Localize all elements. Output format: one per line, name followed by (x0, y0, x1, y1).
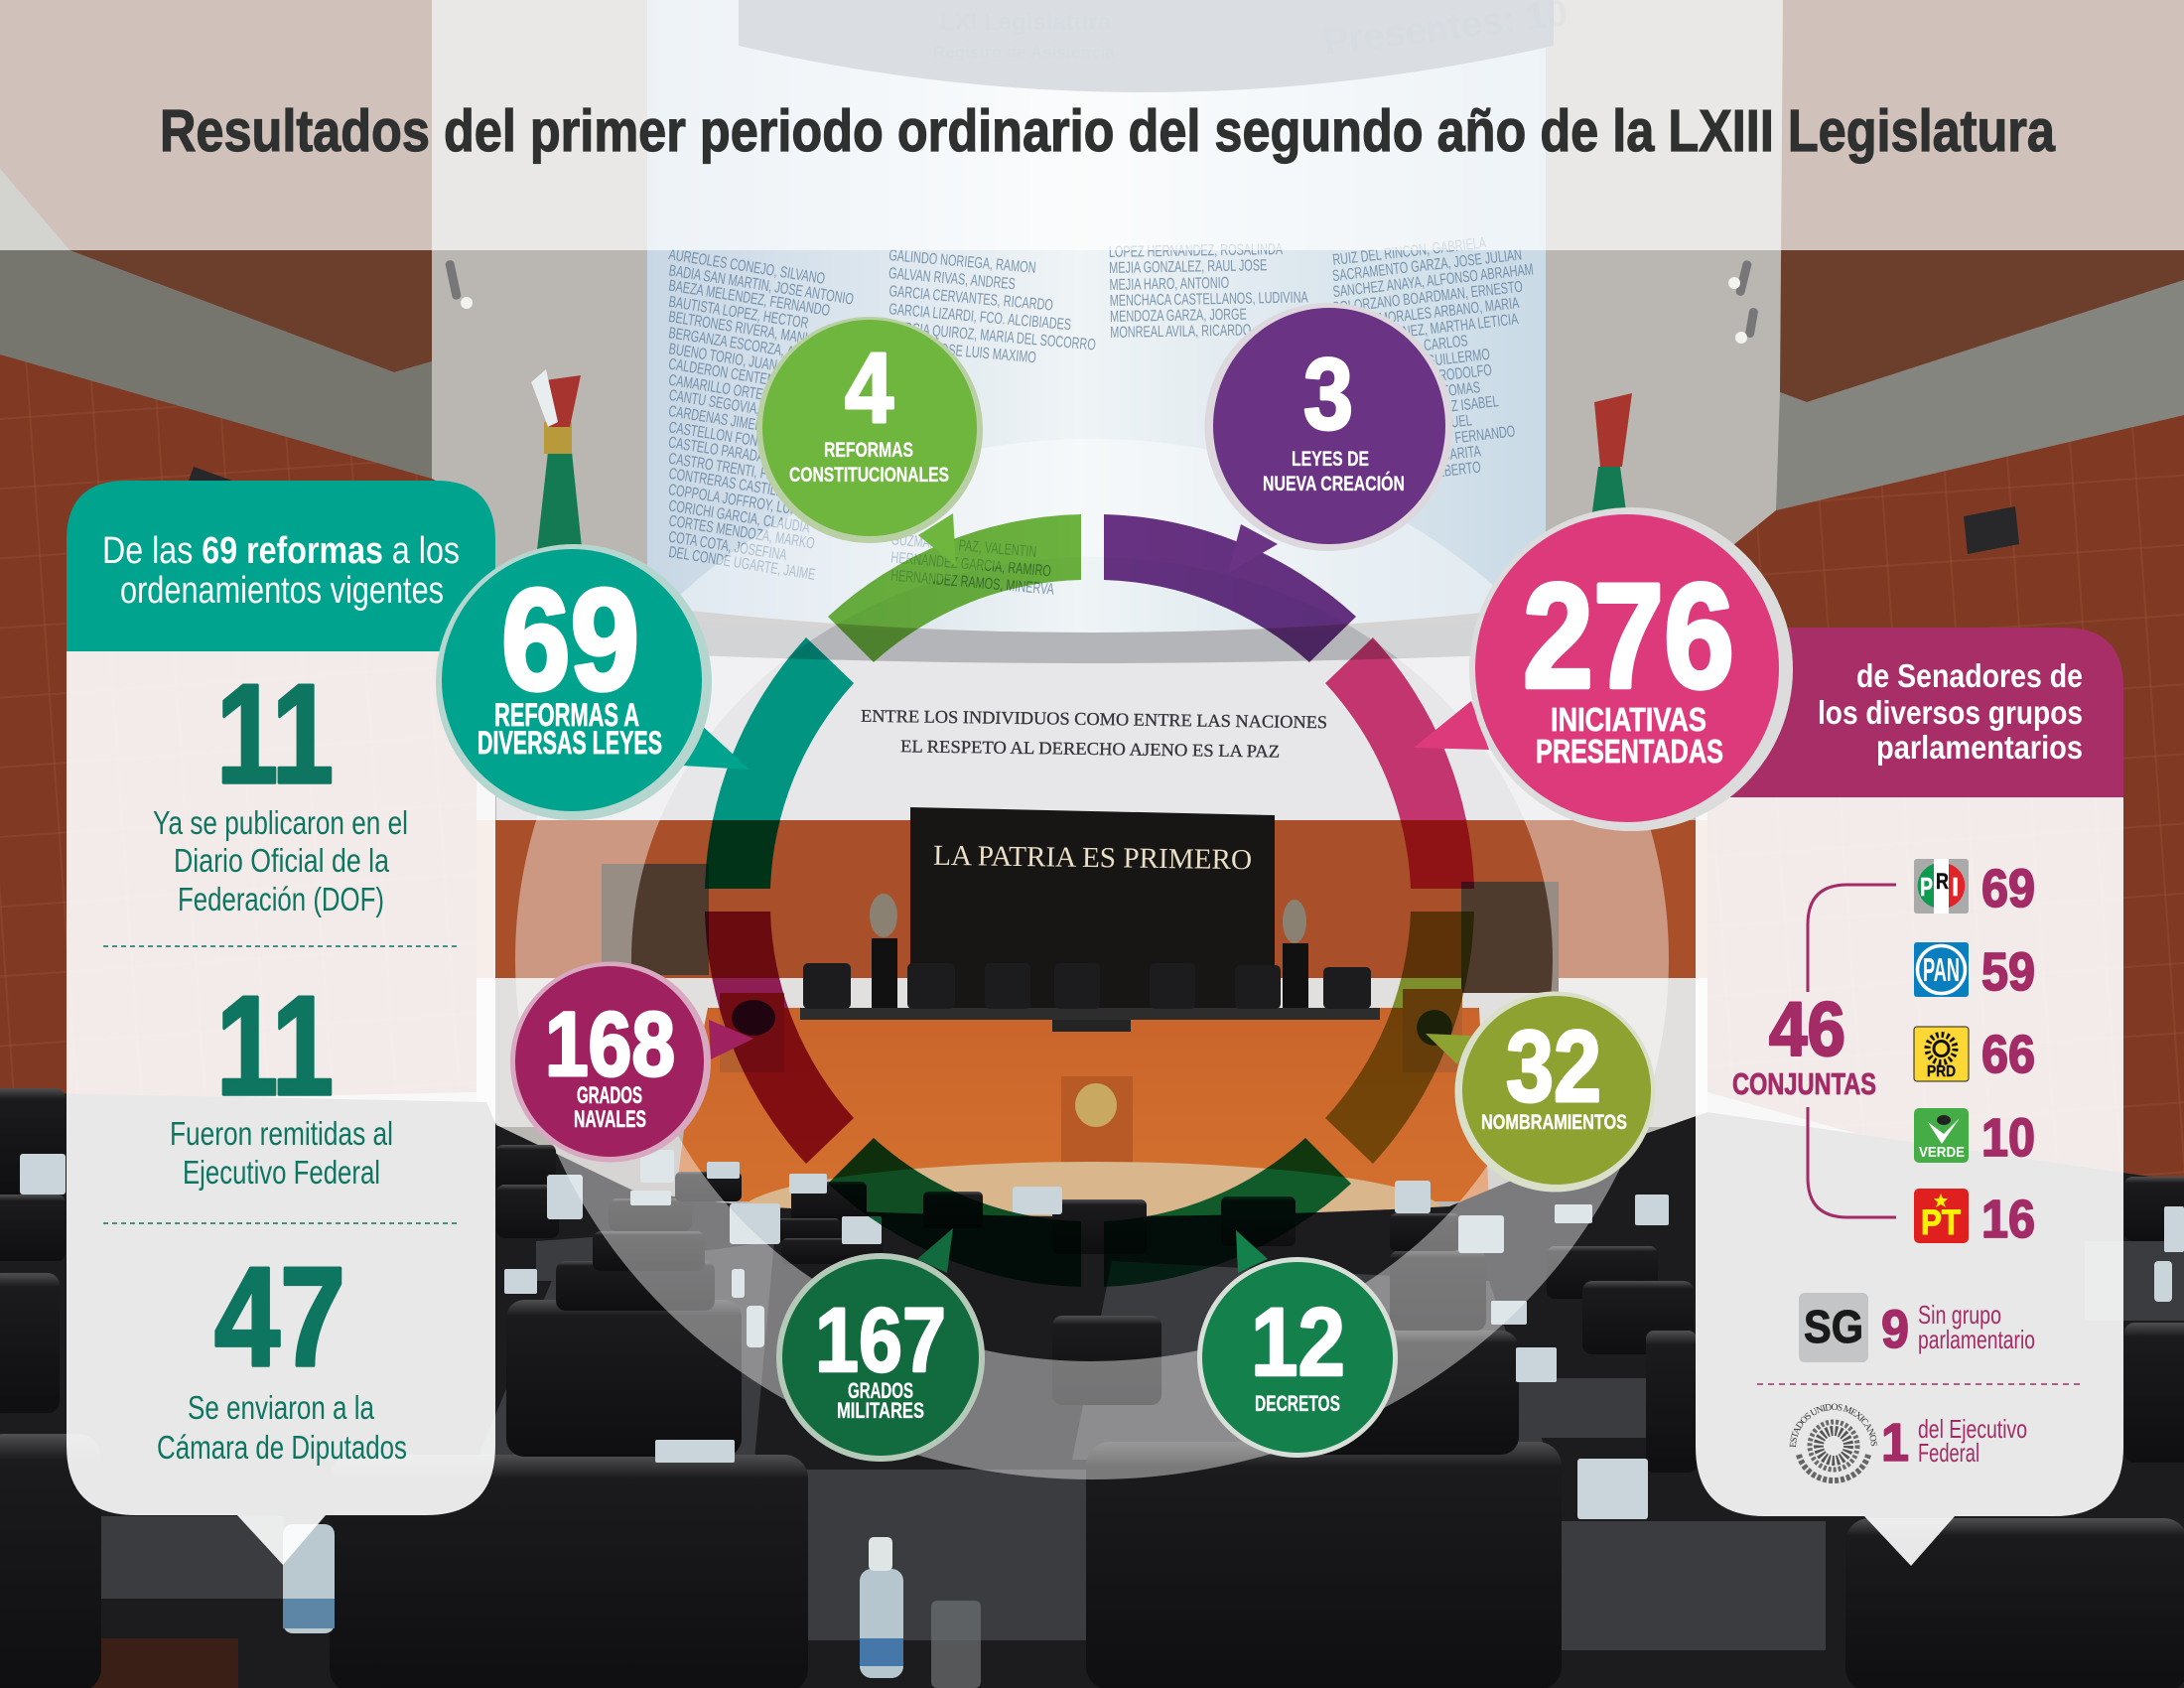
bubble: 12 decretos: 12 (1251, 1288, 1345, 1396)
segment: reformas constitucionales (828, 514, 1081, 662)
names on screen: CALDERON CENTENO, JOSE (667, 354, 818, 395)
names on screen: BAUTISTA LOPEZ, HECTOR (667, 293, 810, 332)
names on screen: ZARATE SALGADO ALBERTO (1331, 459, 1482, 492)
right brick wall (1707, 415, 2184, 1192)
names on screen: VEGA GARCIA HILDA TOMAS (1331, 378, 1481, 412)
bubble: 12 decretos (1197, 1230, 1398, 1458)
names on screen: TAGLE MARTINEZ, MARTHA LETICIA (1331, 310, 1520, 349)
white strip (477, 978, 1707, 1127)
ring diagram segments (705, 514, 1474, 1287)
logo: PAN (1914, 942, 1969, 997)
header text: de Senadores de (1856, 657, 2083, 694)
header text: parlamentarios (1876, 729, 2083, 766)
ejecutivo federal: del Ejecutivo (1918, 1414, 2027, 1444)
stat: 11 remitidas: Fueron remitidas al (170, 1115, 393, 1152)
names on screen: COPPOLA JOFFROY, LUIS (667, 481, 802, 518)
red band (477, 820, 1707, 984)
header text (1818, 657, 2083, 766)
bubble: 168 grados navales: NAVALES (574, 1106, 646, 1133)
panel: senadores por grupo (1696, 628, 2123, 1566)
stat: 11 remitidas: Ejecutivo Federal (183, 1154, 380, 1191)
names on screen: BELTRONES RIVERA, MANLIO (667, 308, 823, 350)
names on screen: CANTU SEGOVIA, ELOY (668, 386, 792, 423)
logo: PRD: PRD (1927, 1063, 1956, 1080)
bubble: 69 reformas a diversas leyes: 69 (501, 559, 639, 720)
bubble: 32 nombramientos (1426, 991, 1656, 1192)
bubble: 168 grados navales: 168 (545, 994, 675, 1095)
segment: grados militares (828, 1138, 1081, 1287)
white wall (496, 645, 1688, 834)
names on screen: CASTELO PARADA, JAVIER (667, 433, 808, 473)
soffit (496, 606, 1688, 663)
names on screen: SANCHEZ ANAYA, ALFONSO ABRAHAM (1332, 260, 1535, 301)
left brick wall (0, 354, 477, 1102)
names on screen: HERNANDEZ GARCIA, RAMIRO (890, 548, 1052, 580)
side lecterns (720, 989, 1462, 1072)
bubble: 69 reformas a diversas leyes: DIVERSAS LEYES (478, 725, 662, 761)
names on screen: COTA COTA, JOSEFINA (667, 528, 789, 564)
segment: reformas a diversas leyes (705, 637, 854, 889)
stat: 11 publicadas: 11 (216, 655, 334, 813)
screen header shape (739, 0, 1554, 92)
header text: De las 69 reformas a los (102, 530, 460, 572)
dais chairs (803, 963, 1371, 1009)
translucent ring (515, 439, 1669, 1479)
names on screen: LOPEZ HERNANDEZ, ROSALINDA (1109, 240, 1284, 261)
logo: PT: PT (1921, 1203, 1961, 1242)
names on screen: GALVAN RIVAS, ANDRES (887, 264, 1017, 293)
names on screen: AUREOLES CONEJO, SILVANO (667, 245, 826, 287)
flags (531, 369, 1632, 586)
bubble: 168 grados navales: GRADOS (577, 1082, 642, 1109)
party counts: 59 (1981, 942, 2035, 1002)
water bottles (283, 1261, 2172, 1688)
names on screen: GARCIA CERVANTES, RICARDO (888, 282, 1054, 314)
panel header (67, 481, 495, 651)
floor under desks (81, 1638, 238, 1688)
ceiling panel left (0, 0, 432, 372)
names on screen: GUZMAN DE PAZ, VALENTIN (890, 530, 1037, 561)
wall inscription (861, 706, 1327, 762)
names on screen: SACRAMENTO GARZA, JOSE JULIAN (1331, 245, 1523, 285)
sin grupo (1799, 1293, 2035, 1362)
title band (0, 0, 2184, 250)
party counts (1981, 859, 2035, 1249)
bubble: 4 reformas constitucionales: CONSTITUCIONALES (789, 464, 949, 487)
joint count: 46 (1769, 987, 1845, 1072)
ejecutivo federal (1789, 1404, 2027, 1483)
sin grupo: 9 (1881, 1300, 1909, 1359)
black panel (910, 807, 1275, 1008)
names on screen: MENCHACA CASTELLANOS, LUDIVINA (1110, 288, 1309, 310)
names on screen: TORRES GARCIA CARLOS (1331, 332, 1469, 364)
icon: national seal: ESTADOS UNIDOS MEXICANOS (1789, 1404, 1878, 1448)
names on screen: CARDENAS JIMENEZ (667, 402, 778, 437)
logo: VERDE: VERDE (1919, 1144, 1965, 1161)
names on screen: VAZQUEZ ARNULFO RODOLFO (1331, 361, 1493, 396)
bubble: 167 grados militares: GRADOS (848, 1378, 913, 1403)
names on screen: MEJIA HARO, ANTONIO (1109, 274, 1229, 294)
bubble: 32 nombramientos: NOMBRAMIENTOS (1481, 1111, 1627, 1134)
panel header (1688, 628, 2123, 797)
podium (1052, 1010, 1133, 1193)
ejecutivo federal: 1 (1881, 1413, 1909, 1473)
stat: 11 publicadas (153, 655, 408, 917)
bubble: 4 reformas constitucionales: REFORMAS (824, 439, 913, 462)
relief panels (602, 864, 709, 975)
stat: 47 diputados: 47 (214, 1238, 345, 1396)
floor (740, 1162, 1444, 1265)
names on screen: CORICHI GARCIA, CLAUDIA (667, 496, 812, 536)
ejecutivo federal: Federal (1918, 1438, 1979, 1468)
names on screen: MEJIA GONZALEZ, RAUL JOSE (1109, 256, 1267, 277)
screen (647, 0, 1546, 633)
joint count: CONJUNTAS (1732, 1066, 1876, 1101)
stat: 11 publicadas: Federación (DOF) (178, 881, 384, 917)
bubble: 168 grados navales (510, 961, 753, 1162)
bubble: 69 reformas a diversas leyes: REFORMAS A (494, 697, 639, 733)
segment: iniciativas presentadas (1325, 637, 1474, 889)
stat: 47 diputados (157, 1238, 407, 1466)
stat: 47 diputados: Se enviaron a la (188, 1389, 375, 1426)
names on screen: GARCIA QUIROZ, MARIA DEL SOCORRO (888, 318, 1096, 353)
bubble: 276 iniciativas presentadas: PRESENTADAS (1536, 733, 1723, 770)
bubble: 32 nombramientos: 32 (1506, 1010, 1601, 1123)
names on screen: BADIA SAN MARTIN, JOSE ANTONIO (668, 261, 855, 308)
panel: reformas ordenamientos: ordenamientos vigentes (120, 570, 444, 612)
names on screen (621, 0, 1570, 600)
busts (870, 894, 1308, 1013)
names on screen: CORTES MENDOZA, MARKO (668, 511, 816, 552)
bubble: 69 reformas a diversas leyes (436, 544, 750, 820)
bubble: 3 leyes de nueva creacion (1205, 303, 1453, 573)
logo: PRI: I (1952, 872, 1959, 902)
bubble: 167 grados militares: MILITARES (837, 1398, 924, 1423)
names on screen: CONTRERAS CASTILLO, ROSA (668, 465, 829, 506)
logo: PRI: P (1920, 872, 1933, 902)
names on screen: BAEZA MELENDEZ, FERNANDO (667, 277, 831, 320)
stat: 11 publicadas: Ya se publicaron en el (153, 804, 408, 841)
names on screen: MONREAL AVILA, RICARDO (1110, 321, 1251, 341)
stat: 11 publicadas: Diario Oficial de la (174, 842, 390, 879)
segment: decretos (1104, 1138, 1351, 1287)
joint count (1732, 987, 1876, 1101)
spotlights (445, 259, 1759, 344)
bubble: 4 reformas constitucionales (756, 317, 983, 566)
bubble: 3 leyes de nueva creacion: NUEVA CREACIÓN (1263, 472, 1405, 495)
names on screen: YUNES ZORRILLA MANUEL (1331, 411, 1473, 445)
names on screen: SOTELO MORALES ARBANO, MARIA (1331, 294, 1521, 333)
bubble: 167 grados militares (776, 1228, 985, 1462)
party counts: 66 (1981, 1025, 2035, 1084)
logo: PRI: R (1936, 869, 1949, 894)
names on screen: HERNANDEZ RAMOS, MINERVA (890, 566, 1055, 598)
wall inscription: EL RESPETO AL DERECHO AJENO ES LA PAZ (900, 736, 1280, 762)
logo: PT (1914, 1189, 1969, 1243)
bubble: 276 iniciativas presentadas: 276 (1523, 552, 1734, 719)
sin grupo: parlamentario (1918, 1325, 2035, 1354)
names on screen: CAMARILLO ORTEGA (667, 371, 780, 406)
ceiling panel right (1780, 0, 2184, 402)
names on screen: ZAMORA GARCIA JUAN FERNANDO (1331, 422, 1516, 461)
names on screen: BUENO TORIO, JUAN (668, 340, 778, 374)
names on screen: BERGANZA ESCORZA, ADRIANA (667, 324, 836, 367)
monitors and name cards (20, 1150, 2184, 1519)
bubble: 3 leyes de nueva creacion: LEYES DE (1292, 448, 1369, 471)
names on screen: TREVINO GARCIA GUILLERMO (1331, 346, 1491, 380)
bubble: 276 iniciativas presentadas: INICIATIVAS (1551, 701, 1706, 738)
names on screen: CASTRO TRENTI, FERNANDO (667, 450, 822, 491)
chairs (0, 1088, 2184, 1688)
party counts: 16 (1981, 1190, 2035, 1249)
logo: PAN: PAN (1923, 951, 1960, 988)
names on screen: SOLORZANO BOARDMAN, ERNESTO (1331, 278, 1524, 317)
names on screen: GALINDO NORIEGA, RAMON (888, 246, 1036, 276)
names on screen: VILLARREAL GONZALEZ ISABEL (1331, 392, 1500, 429)
bubble: 12 decretos: DECRETOS (1255, 1391, 1340, 1416)
names on screen: LXI Legislatura (940, 9, 1112, 36)
bubble: 276 iniciativas presentadas (1414, 507, 1793, 831)
lower seating area (0, 1092, 2184, 1688)
names on screen: GOMEZ, JOSE LUIS MAXIMO (888, 336, 1037, 366)
names on screen: RUIZ DEL RINCON, GABRIELA (1331, 233, 1488, 268)
desks (101, 1231, 2184, 1650)
names on screen: MENDOZA GARZA, JORGE (1110, 306, 1247, 325)
party counts: 69 (1981, 859, 2035, 918)
names on screen: GARCIA LIZARDI, FCO. ALCIBIADES (888, 300, 1072, 334)
icon: national seal (1789, 1404, 1878, 1483)
names on screen: Registro de Asistencia (933, 43, 1115, 62)
wood dais (675, 1008, 1489, 1201)
segment: leyes de nueva creacion (1104, 514, 1356, 662)
stat: 11 remitidas: 11 (216, 967, 334, 1125)
speaker (1964, 506, 2019, 554)
logo: PRI (1914, 859, 1969, 914)
sin grupo: Sin grupo (1918, 1300, 2001, 1330)
bubble: 3 leyes de nueva creacion: 3 (1303, 338, 1353, 451)
segment: grados navales (705, 912, 854, 1164)
logo: PRD (1914, 1027, 1969, 1081)
names on screen: ZAPATA GARCIA MARGARITA (1331, 442, 1482, 477)
bubble: 4 reformas constitucionales: 4 (845, 333, 893, 444)
logo: VERDE (1914, 1108, 1969, 1163)
names on screen: DEL CONDE UGARTE, JAIME (667, 543, 817, 584)
segment: nombramientos (1325, 912, 1474, 1164)
panel inscription: LA PATRIA ES PRIMERO (933, 840, 1252, 876)
connector bracket (1808, 885, 1896, 1217)
stat: 11 remitidas (170, 967, 393, 1191)
header text: los diversos grupos (1818, 694, 2083, 731)
bubble: 167 grados militares: 167 (815, 1290, 946, 1391)
wall inscription: ENTRE LOS INDIVIDUOS COMO ENTRE LAS NACIONES (861, 706, 1327, 732)
party counts: 10 (1981, 1108, 2035, 1168)
stat: 47 diputados: Cámara de Diputados (157, 1429, 407, 1466)
sin grupo: SG (1804, 1301, 1863, 1352)
panel: reformas ordenamientos (67, 481, 495, 1565)
names on screen: CASTELLON FONSECA, JAVIER (667, 418, 831, 461)
